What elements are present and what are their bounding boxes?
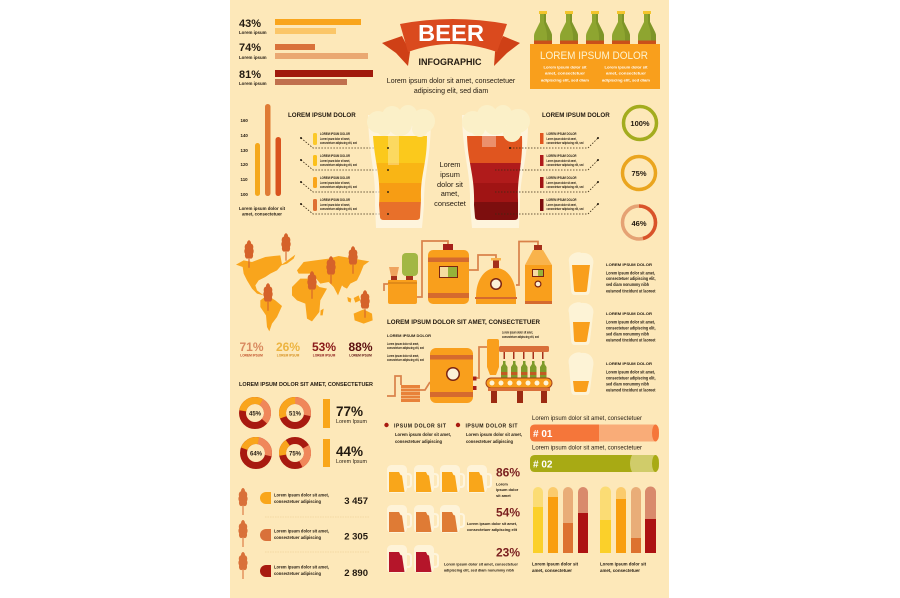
wheat stat 2 890 (238, 552, 368, 579)
cylinder bar 01: # 01 (533, 429, 553, 440)
glass descriptions: Lorem ipsum dolor sit amet, (606, 370, 655, 374)
column chart group 1: Lorem ipsum dolor sit (532, 562, 579, 566)
left connectors (300, 137, 388, 214)
glass descriptions: sed diam nonummy nibh (606, 332, 649, 336)
beer infographic poster (230, 0, 669, 598)
donut 45%: 45% (249, 412, 262, 418)
intro text: Lorem ipsum dolor sit amet, consectetuer (387, 78, 516, 85)
cylinder bar 02: Lorem ipsum dolor sit amet, consectetuer (532, 446, 642, 452)
ring 46%: 46% (631, 219, 647, 228)
donut 51%: 51% (289, 412, 302, 418)
left bar chart: 100 (240, 192, 248, 197)
wheat stat 3 457: consectetuer adipiscing (274, 499, 321, 504)
ring 75% (622, 156, 656, 190)
wheat stat 2 890: Lorem ipsum dolor sit amet, (274, 564, 329, 570)
glass descriptions (606, 262, 656, 392)
glass descriptions: Lorem ipsum dolor sit amet, (606, 320, 655, 324)
column chart group 2: amet, consectetuer (600, 568, 640, 573)
bullet note 1: Lorem ipsum dolor sit amet, (395, 432, 451, 437)
right list: Lorem ipsum dolor sit amet, (546, 136, 576, 141)
beer glass sample 3 (569, 352, 593, 395)
light beer glass (367, 105, 435, 228)
dark beer glass (462, 105, 530, 228)
cylinder bar 02 (530, 446, 659, 472)
map percentages: LOREM IPSUM (349, 354, 372, 358)
ring 100%: 100% (630, 119, 650, 128)
stat 23%: Lorem ipsum dolor sit amet, consectetuer (444, 562, 518, 566)
map percentages: 26% (276, 340, 300, 354)
bottling notes (387, 330, 539, 362)
bullet note 2: Lorem ipsum dolor sit amet, (466, 432, 522, 437)
left bar chart: amet, consectetuer (242, 212, 282, 216)
right list (540, 131, 584, 211)
stat 23%: 23% (496, 546, 520, 560)
bar group 43% (239, 18, 361, 35)
glass descriptions: sed diam nonummy nibh (606, 382, 649, 386)
left bar chart: 130 (240, 148, 248, 153)
wheat stat 2 305: consectetuer adipiscing (274, 535, 321, 540)
bottles box: adipiscing elit, sed diam (541, 78, 590, 82)
stat 54%: Lorem ipsum dolor sit amet, (467, 521, 517, 526)
left list: Lorem ipsum dolor sit amet, (320, 180, 350, 185)
ring 46% (622, 206, 656, 239)
cylinder bar 01: Lorem ipsum dolor sit amet, consectetuer (532, 416, 642, 422)
top percent bars (239, 18, 373, 86)
map percentages: 88% (348, 340, 373, 354)
bottling notes: consectetuer adipiscing elit, sed (387, 357, 424, 362)
beer glass sample 1 (569, 252, 593, 295)
world map (236, 255, 373, 331)
coil (401, 385, 420, 402)
storage tank (430, 348, 476, 403)
bottling notes: Lorem ipsum dolor sit amet, (387, 353, 419, 358)
left bar chart: 160 (240, 118, 248, 123)
column chart group 2: Lorem ipsum dolor sit (600, 562, 647, 566)
right list: LOREM IPSUM DOLOR (546, 197, 577, 202)
wheat stat 3 457: Lorem ipsum dolor sit amet, (274, 492, 329, 498)
left list: LOREM IPSUM DOLOR (320, 175, 350, 180)
bar group 74%: 74% (239, 42, 261, 54)
glass descriptions: euismod tincidunt ut laoreet (606, 388, 656, 392)
title ribbon (382, 19, 520, 67)
left list (313, 131, 357, 211)
heading right: LOREM IPSUM DOLOR (542, 112, 610, 119)
stat 23%: adipiscing elit, sed diam nonummy nibh (444, 568, 515, 572)
left bar chart: 110 (240, 177, 248, 182)
bullet note 2: IPSUM DOLOR SIT (466, 424, 518, 430)
right list: LOREM IPSUM DOLOR (546, 175, 577, 180)
wheat stat 3 457: 3 457 (344, 496, 368, 507)
glass descriptions: sed diam nonummy nibh (606, 282, 649, 287)
right list: LOREM IPSUM DOLOR (546, 131, 577, 136)
big tank (428, 244, 469, 304)
map percentages: LOREM IPSUM (313, 354, 336, 358)
glass descriptions: LOREM IPSUM DOLOR (606, 311, 652, 316)
bottles box: LOREM IPSUM DOLOR (540, 50, 648, 62)
wheat stat 2 305 (238, 520, 369, 547)
map percentages: LOREM IPSUM (240, 354, 263, 358)
title text: BEER (418, 20, 484, 46)
ring 100% (624, 106, 656, 140)
center text (434, 160, 466, 208)
column chart group 2 (600, 487, 656, 573)
bullet note 2 (456, 423, 522, 444)
column chart group 1: amet, consectetuer (532, 568, 572, 573)
bottles box (530, 11, 660, 89)
stat 86%: 86% (496, 466, 520, 480)
right list: consectetuer adipiscing elit, sed (546, 162, 584, 167)
center text: dolor sit (437, 180, 463, 189)
intro text (387, 78, 516, 95)
bar group 43%: Lorem ipsum (239, 30, 267, 35)
map percentages: 53% (312, 340, 336, 354)
wheat stat 2 890: 2 890 (344, 568, 368, 579)
ring 75%: 75% (631, 169, 647, 178)
right connectors (495, 137, 599, 214)
stat 44%: 44% (336, 444, 363, 459)
heading left: LOREM IPSUM DOLOR (288, 112, 356, 119)
map percentages: LOREM IPSUM (277, 354, 300, 358)
left list: consectetuer adipiscing elit, sed (320, 206, 357, 211)
left list: LOREM IPSUM DOLOR (320, 153, 350, 158)
map percentages (239, 340, 373, 358)
beer glass sample 2 (569, 302, 593, 345)
stat 54%: 54% (496, 506, 520, 520)
glass descriptions: consectetuer adipiscing elit, (606, 326, 656, 330)
bar group 81% (239, 69, 373, 86)
stat 86%: Lorem (496, 482, 508, 486)
bottling notes: Lorem ipsum dolor sit amet, (502, 330, 533, 334)
wheat stat 2 305: Lorem ipsum dolor sit amet, (274, 528, 329, 534)
glass descriptions: euismod tincidunt ut laoreet (606, 288, 656, 294)
center text: Lorem (440, 160, 460, 169)
donut charts (238, 396, 312, 470)
stat 86%: sit amet (496, 493, 511, 498)
brewery top diagram (384, 241, 552, 304)
section heading: LOREM IPSUM DOLOR SIT AMET, CONSECTETUER (387, 319, 540, 326)
stat 77%: 77% (336, 404, 363, 419)
column chart group 1 (532, 487, 588, 573)
right list: consectetuer adipiscing elit, sed (546, 140, 584, 145)
stat 44%: Lorem Ipsum (336, 459, 367, 465)
wheat stat 2 890: consectetuer adipiscing (274, 571, 321, 576)
left bar chart: 120 (240, 162, 248, 167)
left list: consectetuer adipiscing elit, sed (320, 140, 357, 145)
cylinder bar 01 (530, 416, 659, 442)
glass descriptions: Lorem ipsum dolor sit amet, (606, 270, 655, 276)
donut 64%: 64% (250, 452, 263, 458)
wheat stat 2 305: 2 305 (344, 532, 369, 542)
glass descriptions: LOREM IPSUM DOLOR (606, 262, 652, 267)
background panel (230, 0, 669, 598)
left bar chart (239, 104, 286, 216)
stat 44% (323, 439, 367, 467)
right list: consectetuer adipiscing elit, sed (546, 206, 584, 211)
left bar chart: 140 (240, 133, 248, 138)
glass descriptions: consectetuer adipiscing elit, (606, 376, 656, 380)
wheat stat 3 457 (238, 488, 368, 515)
right list: Lorem ipsum dolor sit amet, (546, 158, 576, 163)
center text: ipsum (440, 170, 460, 179)
mug row 86% (387, 465, 491, 493)
bottling notes: consectetuer adipiscing elit, sed (387, 345, 424, 350)
bottle tank (525, 245, 552, 304)
bar group 81%: 81% (239, 69, 261, 81)
right list: consectetuer adipiscing elit, sed (546, 184, 584, 189)
subtitle: INFOGRAPHIC (418, 57, 482, 67)
left list: consectetuer adipiscing elit, sed (320, 184, 357, 189)
mug row 54% (387, 505, 464, 533)
left list: LOREM IPSUM DOLOR (320, 131, 350, 136)
stat 77% (323, 399, 367, 428)
left list: LOREM IPSUM DOLOR (320, 197, 350, 202)
cylinder bar 02: # 02 (533, 460, 553, 470)
bottles box: amet, consectetuer (545, 70, 586, 76)
bullet note 1 (384, 423, 451, 444)
glass descriptions: consectetuer adipiscing elit, (606, 276, 656, 281)
stat 86%: ipsum dolor (496, 487, 519, 492)
small tank (388, 253, 418, 304)
glass descriptions: LOREM IPSUM DOLOR (606, 361, 652, 366)
mug row 23% (387, 545, 438, 573)
right list: LOREM IPSUM DOLOR (546, 153, 577, 158)
bottling notes: consectetuer adipiscing elit, sed (502, 334, 539, 339)
bullet note 2: consectetuer adipiscing (466, 439, 513, 444)
bottling notes: LOREM IPSUM DOLOR (387, 333, 431, 338)
stat 86% (496, 466, 520, 498)
intro text: adipiscing elit, sed diam (414, 88, 488, 95)
stat 54% (467, 506, 520, 532)
map percentages: 71% (239, 340, 264, 354)
bottling line diagram (387, 339, 552, 403)
bottles box: amet, consectetuer (606, 70, 647, 76)
bottles box: Lorem ipsum dolor sit (604, 64, 648, 70)
bar group 43%: 43% (239, 18, 261, 30)
bottling notes: Lorem ipsum dolor sit amet, (387, 341, 419, 346)
right list: Lorem ipsum dolor sit amet, (546, 180, 576, 185)
bullet note 1: IPSUM DOLOR SIT (394, 424, 447, 430)
bottles box: adipiscing elit, sed diam (602, 78, 651, 82)
left list: Lorem ipsum dolor sit amet, (320, 136, 350, 141)
left list: Lorem ipsum dolor sit amet, (320, 158, 350, 163)
bottles box: Lorem ipsum dolor sit (544, 64, 587, 70)
left list: Lorem ipsum dolor sit amet, (320, 202, 350, 207)
center text: amet, (441, 189, 459, 198)
donut 75%: 75% (289, 452, 302, 458)
stat 54%: consectetuer adipiscing elit (467, 527, 518, 532)
map wheat markers (244, 233, 370, 318)
bar group 74%: Lorem ipsum (239, 55, 267, 60)
left list: consectetuer adipiscing elit, sed (320, 162, 357, 167)
kettle (475, 258, 517, 304)
bar group 81%: Lorem ipsum (239, 81, 267, 86)
left bar chart: Lorem ipsum dolor sit (239, 206, 286, 211)
glass descriptions: euismod tincidunt ut laoreet (606, 338, 656, 342)
bullet note 1: consectetuer adipiscing (395, 439, 442, 444)
right list: Lorem ipsum dolor sit amet, (546, 202, 576, 207)
stat 23% (444, 546, 520, 572)
stat 77%: Lorem Ipsum (336, 419, 367, 425)
filler and conveyor (486, 339, 552, 403)
bar group 74% (239, 42, 368, 60)
donut section heading: LOREM IPSUM DOLOR SIT AMET, CONSECTETUER (239, 382, 373, 388)
center text: consectet (434, 199, 466, 208)
